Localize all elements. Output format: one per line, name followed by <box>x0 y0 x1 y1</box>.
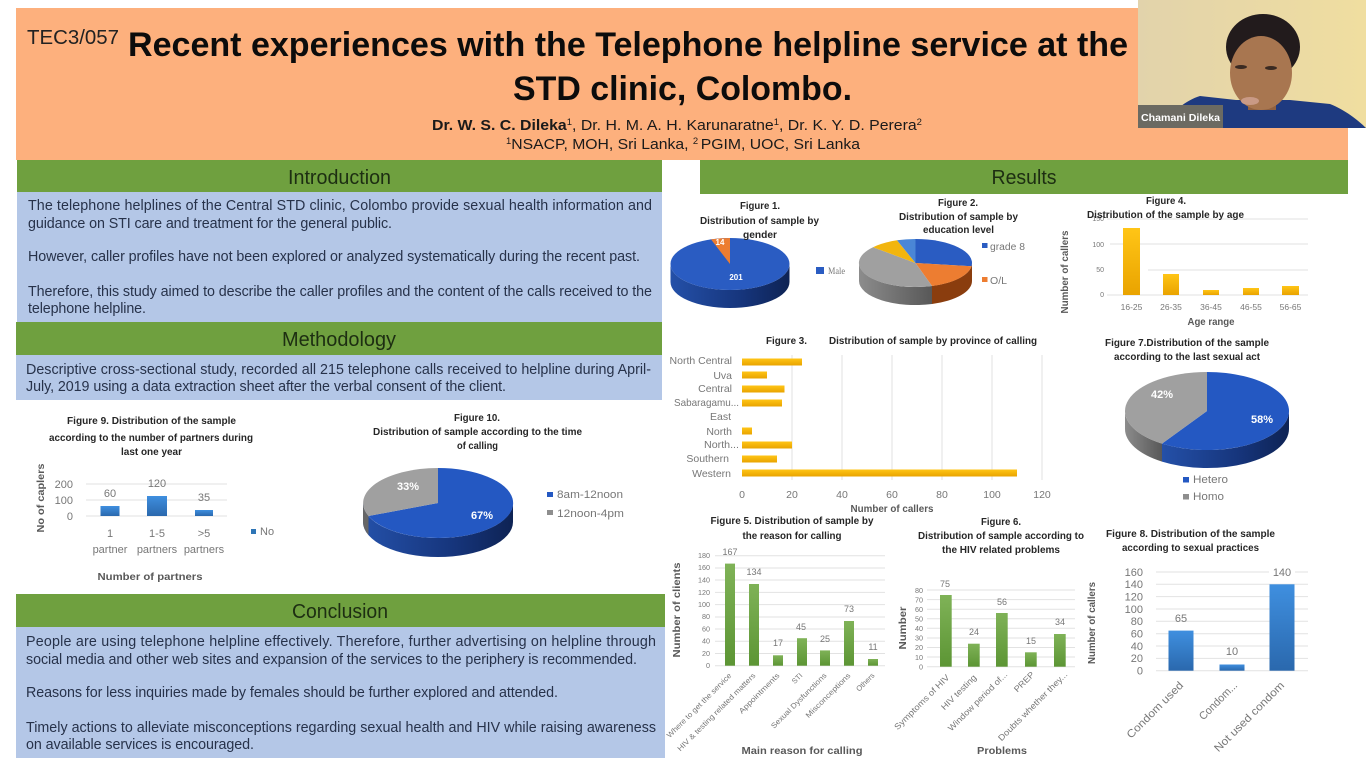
figure 3: province bar chart: 20 <box>786 489 798 501</box>
figure 3: province bar chart: Number of callers <box>850 504 934 515</box>
figure 7: last sexual act pie <box>1105 338 1289 503</box>
figure 8 title: according to sexual practices <box>1122 543 1259 554</box>
figure 2: education pie <box>859 198 1025 305</box>
figure 6: HIV related problems bar chart: Symptoms of HIV <box>892 672 952 732</box>
figure 4: age bar chart: 26-35 <box>1160 302 1182 312</box>
figure 10: time of calling pie: 8am-12noon <box>557 489 623 501</box>
heading: results: Results <box>992 167 1056 189</box>
figure 3 title: Figure 3. <box>766 336 807 347</box>
figure 8: sexual practices bar chart: Condom... <box>1197 680 1240 723</box>
figure 4 title <box>1087 196 1244 221</box>
figure 8 title <box>1106 529 1275 554</box>
figure 4: age bar chart: 46-55 <box>1240 302 1262 312</box>
figure 9 title <box>49 416 253 458</box>
figure 7 title <box>1105 338 1269 363</box>
title: STD clinic, Colombo. <box>513 70 852 108</box>
figure 10: time of calling pie <box>363 413 624 557</box>
figure 3: province bar chart: Southern <box>686 453 729 465</box>
header banner <box>16 8 1348 160</box>
figure 4: age bar chart: Number of callers <box>1060 230 1071 314</box>
heading: conclusion <box>16 594 665 627</box>
panel: introduction <box>17 160 662 322</box>
figure 6: HIV related problems bar chart: 30 <box>915 634 923 642</box>
conclusion text: Timely actions to alleviate misconceptions regarding sexual health and HIV while raising awareness <box>26 720 656 736</box>
figure 8: sexual practices bar chart: 160 <box>1125 567 1143 579</box>
figure 4: age bar chart: 100 <box>1092 242 1104 249</box>
figure 10: time of calling pie: 12noon-4pm <box>557 508 624 520</box>
figure 6: HIV related problems bar chart: 80 <box>915 586 923 595</box>
figure 9: partners bar chart: 35 <box>198 492 210 504</box>
figure 3: province bar chart: 80 <box>936 489 948 501</box>
figure 6: HIV related problems bar chart: 70 <box>915 596 923 604</box>
figure 5: reason for calling bar chart: 120 <box>698 588 710 597</box>
figure 5: reason for calling bar chart: 160 <box>698 563 710 572</box>
affiliations: 1 <box>506 136 511 146</box>
methodology text <box>26 362 651 395</box>
figure 6: HIV related problems bar chart: 60 <box>915 605 923 614</box>
heading: methodology: Methodology <box>282 329 396 351</box>
figure 8: sexual practices bar chart: 0 <box>1137 666 1143 678</box>
figure 6 title: Distribution of sample according to <box>918 531 1084 542</box>
figure 5: reason for calling bar chart: Number of clients <box>672 562 683 657</box>
figure 6: HIV related problems bar chart: Number <box>898 606 909 650</box>
panel: conclusion <box>16 594 665 758</box>
figure 5: reason for calling bar chart <box>665 516 885 757</box>
figure 9: partners bar chart: partners <box>184 544 225 556</box>
figure 9: partners bar chart: >5 <box>198 528 210 540</box>
figure 7 title: according to the last sexual act <box>1114 352 1261 363</box>
figure 6: HIV related problems bar chart: 20 <box>915 643 923 652</box>
figure 5: reason for calling bar chart: 0 <box>706 661 710 670</box>
figure 6: HIV related problems bar chart: 56 <box>997 597 1007 607</box>
figure 3: province bar chart: Western <box>692 468 731 480</box>
figure 3: province bar chart: 60 <box>886 489 898 501</box>
figure 5: reason for calling bar chart: STI <box>790 671 804 686</box>
figure 6: HIV related problems bar chart: PREP <box>1012 669 1037 694</box>
figure 4: age bar chart <box>1060 196 1308 328</box>
figure 9: partners bar chart: 1 <box>107 528 113 540</box>
figure 4: age bar chart: 50 <box>1096 267 1104 274</box>
figure 9 title: according to the number of partners during <box>49 433 253 444</box>
figure 5 title <box>710 516 874 542</box>
figure 6 title: Figure 6. <box>981 517 1021 528</box>
figure 10 title: Distribution of sample according to the time <box>373 427 582 438</box>
methodology text: Descriptive cross-sectional study, recorded all 215 telephone calls received to helpline during April- <box>26 362 651 378</box>
figure 3: province bar chart: 0 <box>739 489 745 501</box>
figure 6: HIV related problems bar chart: Problems <box>977 746 1027 757</box>
figure 2 title: Figure 2. <box>938 198 978 209</box>
introduction text <box>28 198 652 317</box>
figure 6: HIV related problems bar chart: 15 <box>1026 636 1036 646</box>
figure 5: reason for calling bar chart: 140 <box>698 576 710 584</box>
figure 5: reason for calling bar chart: 73 <box>844 604 854 614</box>
conclusion text: social media and other web sites and expansion of the services to the periphery is recommended. <box>26 652 637 668</box>
figure 1 title: Distribution of sample by <box>700 216 819 227</box>
figure 4: age bar chart: 56-65 <box>1280 302 1302 312</box>
figure 6: HIV related problems bar chart: 50 <box>915 614 923 624</box>
figure 4: age bar chart: 16-25 <box>1121 302 1143 312</box>
figure 8: sexual practices bar chart <box>1087 529 1308 755</box>
figure 3: province bar chart: 40 <box>836 489 848 501</box>
affiliations: NSACP, MOH, Sri Lanka, <box>511 136 693 153</box>
poster code: TEC3/057 <box>27 27 119 49</box>
figure 8: sexual practices bar chart: 140 <box>1125 579 1143 591</box>
introduction text: telephone helpline. <box>28 301 146 317</box>
webcam video overlay <box>1138 0 1366 128</box>
figure 5: reason for calling bar chart: 45 <box>796 622 806 632</box>
figure 1 title <box>700 201 819 241</box>
figure 5: reason for calling bar chart: 167 <box>722 547 738 557</box>
figure 9: partners bar chart: No <box>260 526 274 538</box>
figure 8: sexual practices bar chart: Not used condom <box>1212 680 1287 755</box>
affiliations: 2 <box>693 136 701 146</box>
figure 4 title: Distribution of the sample by age <box>1087 210 1244 221</box>
authors: , Dr. K. Y. D. Perera <box>779 117 917 134</box>
figure 8: sexual practices bar chart: 10 <box>1226 646 1238 658</box>
figure 7: last sexual act pie: Homo <box>1193 491 1224 503</box>
figure 1: gender pie: 14 <box>716 238 725 247</box>
figure 6: HIV related problems bar chart: 10 <box>915 653 923 662</box>
figure 1: gender pie: 201 <box>729 273 743 282</box>
figure 6: HIV related problems bar chart <box>892 517 1084 757</box>
name tag <box>1138 105 1223 128</box>
conclusion text: on available services is encouraged. <box>26 737 254 753</box>
figure 8: sexual practices bar chart: 65 <box>1175 613 1187 625</box>
figure 4: age bar chart: 0 <box>1100 292 1104 299</box>
figure 9: partners bar chart: partners <box>137 544 178 556</box>
figure 8: sexual practices bar chart: 20 <box>1131 653 1143 665</box>
authors: 2 <box>917 117 922 127</box>
figure 8: sexual practices bar chart: 40 <box>1131 641 1143 653</box>
figure 3: province bar chart: Uva <box>713 370 732 382</box>
figure 6: HIV related problems bar chart: Doubts whether they... <box>996 669 1069 743</box>
figure 5: reason for calling bar chart: 17 <box>773 638 783 648</box>
authors: 1 <box>774 117 779 127</box>
figure 4: age bar chart: 150 <box>1092 216 1104 223</box>
figure 10 title <box>373 413 582 452</box>
figure 5: reason for calling bar chart: Sexual Dysfunctions <box>769 671 829 730</box>
figure 4: age bar chart: 36-45 <box>1200 302 1222 312</box>
figure 3: province bar chart: East <box>710 411 731 423</box>
figure 6: HIV related problems bar chart: 34 <box>1055 617 1065 627</box>
figure 9: partners bar chart <box>36 416 274 583</box>
figure 8: sexual practices bar chart: 120 <box>1125 592 1143 604</box>
figure 10 title: of calling <box>457 441 498 452</box>
introduction text: guidance on STI care and treatment for the general public. <box>28 216 392 232</box>
name tag: Chamani Dileka <box>1141 112 1220 124</box>
figure 2 title <box>899 198 1018 236</box>
figure 2: education pie: O/L <box>990 276 1007 287</box>
figure 1: gender pie <box>670 201 845 308</box>
figure 2 title: Distribution of sample by <box>899 212 1018 223</box>
figure 8: sexual practices bar chart: 80 <box>1131 616 1143 628</box>
figure 9 title: last one year <box>121 447 182 458</box>
figure 7: last sexual act pie: 58% <box>1251 414 1273 426</box>
heading: methodology <box>16 322 662 355</box>
figure 5: reason for calling bar chart: 40 <box>702 636 710 646</box>
figure 5 title: the reason for calling <box>742 531 842 542</box>
figure 5 title: Figure 5. Distribution of sample by <box>710 516 874 527</box>
introduction text: The telephone helplines of the Central STD clinic, Colombo provide sexual health information and <box>28 198 652 214</box>
figure 10: time of calling pie: 33% <box>397 481 419 493</box>
figure 8: sexual practices bar chart: Condom used <box>1125 680 1186 741</box>
figure 5: reason for calling bar chart: 20 <box>702 649 710 658</box>
figure 9: partners bar chart: 0 <box>67 511 73 523</box>
figure 8: sexual practices bar chart: 100 <box>1125 604 1143 616</box>
figure 1 title: Figure 1. <box>740 201 780 212</box>
figure 10 title: Figure 10. <box>454 413 500 424</box>
heading: results <box>700 160 1348 194</box>
figure 3: province bar chart: Central <box>698 383 732 395</box>
figure 3 title: Distribution of sample by province of calling <box>829 336 1037 347</box>
methodology text: July, 2019 using a data extraction sheet after the verbal consent of the client. <box>26 379 506 395</box>
figure 4: age bar chart: Age range <box>1188 317 1235 328</box>
figure 6 title: the HIV related problems <box>942 545 1060 556</box>
figure 5: reason for calling bar chart: 11 <box>868 642 878 652</box>
introduction text: However, caller profiles have not been explored or analyzed systematically during the recent past. <box>28 249 640 265</box>
figure 8: sexual practices bar chart: Number of callers <box>1087 582 1098 664</box>
figure 9 title: Figure 9. Distribution of the sample <box>67 416 236 427</box>
figure 10: time of calling pie: 67% <box>471 510 493 522</box>
authors: , Dr. H. M. A. H. Karunaratne <box>572 117 774 134</box>
figure 1: gender pie: Male <box>828 266 845 276</box>
figure 6: HIV related problems bar chart: 75 <box>940 579 950 589</box>
figure 2: education pie: grade 8 <box>990 242 1025 253</box>
figure 9: partners bar chart: 60 <box>104 488 116 500</box>
title: Recent experiences with the Telephone helpline service at the <box>128 26 1128 64</box>
title <box>128 26 1128 108</box>
introduction text: Therefore, this study aimed to describe the caller profiles and the content of the calls received to the <box>28 284 652 300</box>
figure 9: partners bar chart: 200 <box>55 479 73 491</box>
figure 3: province bar chart <box>670 336 1051 515</box>
figure 6: HIV related problems bar chart: 0 <box>919 662 923 672</box>
authors: 1 <box>567 117 572 127</box>
figure 1 title: gender <box>743 230 777 241</box>
figure 9: partners bar chart: 120 <box>148 478 166 490</box>
figure 5: reason for calling bar chart: HIV & testing related matters <box>675 671 758 753</box>
authors: Dr. W. S. C. Dileka <box>432 117 567 134</box>
figure 7: last sexual act pie: 42% <box>1151 389 1173 401</box>
figure 3: province bar chart: North <box>706 426 732 438</box>
figure 4 title: Figure 4. <box>1146 196 1186 207</box>
figure 7: last sexual act pie: Hetero <box>1193 474 1228 486</box>
figure 8 title: Figure 8. Distribution of the sample <box>1106 529 1275 540</box>
figure 5: reason for calling bar chart: Others <box>854 671 877 693</box>
heading: conclusion: Conclusion <box>292 601 388 623</box>
conclusion text: People are using telephone helpline effectively. Therefore, further advertising on helpline through <box>26 634 656 650</box>
conclusion text: Reasons for less inquiries made by females should be further explored and attended. <box>26 685 558 701</box>
figure 3: province bar chart: North Central <box>670 355 732 367</box>
figure 6: HIV related problems bar chart: Window period of... <box>946 669 1009 733</box>
figure 5: reason for calling bar chart: Misconceptions <box>804 671 853 720</box>
figure 5: reason for calling bar chart: 25 <box>820 634 830 644</box>
figure 9: partners bar chart: 1-5 <box>149 528 165 540</box>
figure 3: province bar chart: 120 <box>1033 489 1051 501</box>
figure 3: province bar chart: North... <box>704 439 739 451</box>
figure 8: sexual practices bar chart: 140 <box>1273 567 1291 579</box>
figure 3: province bar chart: 100 <box>983 489 1001 501</box>
figure 5: reason for calling bar chart: 60 <box>702 624 710 634</box>
affiliations: PGIM, UOC, Sri Lanka <box>701 136 861 153</box>
figure 6 title <box>918 517 1084 556</box>
figure 5: reason for calling bar chart: Main reason for calling <box>742 746 862 757</box>
figure 9: partners bar chart: 100 <box>55 495 73 507</box>
heading: introduction: Introduction <box>288 167 391 189</box>
figure 7 title: Figure 7.Distribution of the sample <box>1105 338 1269 349</box>
figure 2 title: education level <box>923 225 994 236</box>
figure 5: reason for calling bar chart: Where to get the service <box>665 671 733 740</box>
figure 5: reason for calling bar chart: 180 <box>698 551 710 560</box>
figure 5: reason for calling bar chart: Appointments <box>737 671 782 716</box>
heading: introduction <box>17 160 662 192</box>
panel: methodology <box>16 322 662 400</box>
figure 5: reason for calling bar chart: 100 <box>698 600 710 609</box>
figure 6: HIV related problems bar chart: HIV testing <box>939 672 979 712</box>
figure 3: province bar chart: Sabaragamu... <box>674 397 739 409</box>
figure 6: HIV related problems bar chart: 40 <box>915 624 923 633</box>
figure 5: reason for calling bar chart: 134 <box>746 567 762 577</box>
figure 8: sexual practices bar chart: 60 <box>1131 628 1143 640</box>
figure 9: partners bar chart: No of caplers <box>36 463 47 532</box>
conclusion text <box>26 634 656 753</box>
figure 5: reason for calling bar chart: 80 <box>702 612 710 621</box>
figure 9: partners bar chart: partner <box>93 544 128 556</box>
figure 6: HIV related problems bar chart: 24 <box>969 627 979 637</box>
figure 9: partners bar chart: Number of partners <box>98 572 203 583</box>
